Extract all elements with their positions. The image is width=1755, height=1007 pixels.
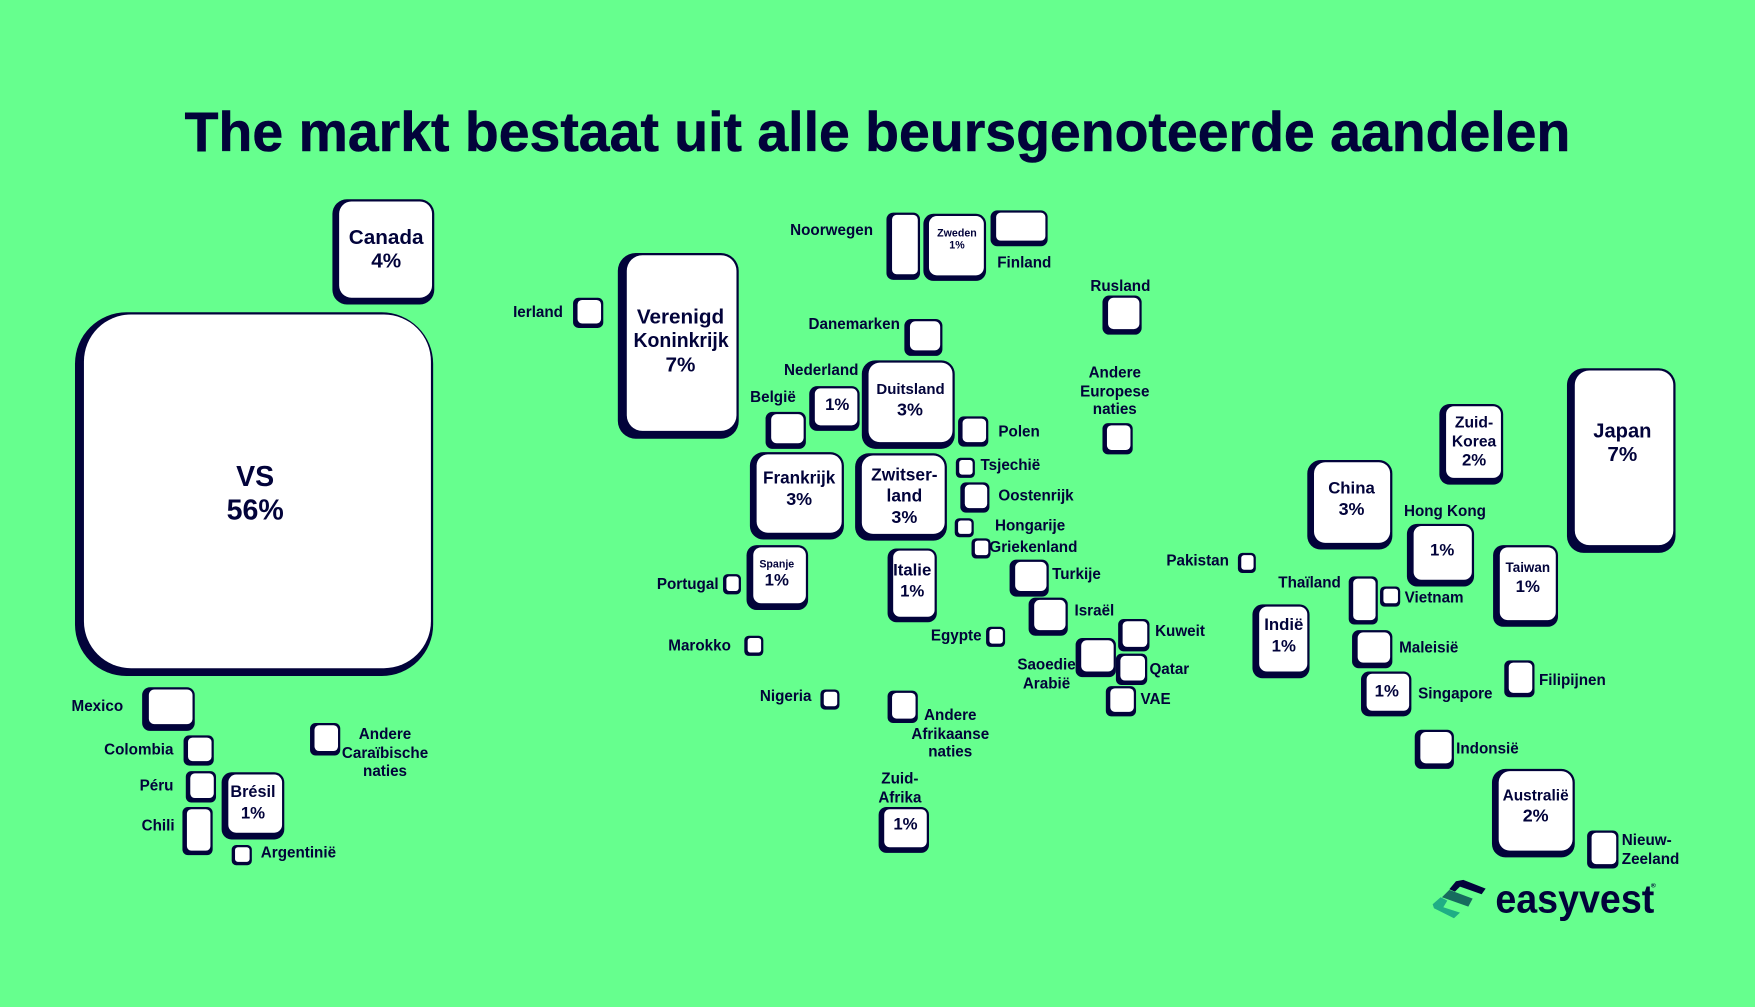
country: VAE: [1106, 686, 1171, 716]
country: Zuid-Afrika: Zuid-: [881, 771, 918, 788]
country: Nieuw-Zeeland: [1587, 830, 1679, 869]
country: Taiwan: 1%: [1516, 577, 1540, 596]
country: Andere Afrikaanse naties: [888, 691, 989, 761]
country: Colombia: Colombia: [104, 741, 174, 758]
country: Polen: [958, 416, 1040, 447]
country: Egypte: [931, 627, 1005, 647]
country: Oostenrijk: Oostenrijk: [998, 487, 1074, 504]
country: Brésil: Brésil: [230, 783, 275, 801]
country: Griekenland: Griekenland: [989, 539, 1077, 556]
country: Indië: Indië: [1264, 615, 1303, 634]
country: Thaïland: [1278, 575, 1378, 625]
country: Australië: 2%: [1523, 806, 1549, 826]
country: Singapore: Singapore: [1418, 686, 1493, 703]
country: Ierland: Ierland: [513, 304, 563, 321]
country: Zweden: Zweden: [937, 227, 977, 239]
country: Nieuw-Zeeland: Zeeland: [1622, 851, 1679, 868]
country: Andere Europese naties: [1080, 364, 1149, 454]
country: Danemarken: [809, 316, 942, 356]
country: Italie: [888, 548, 937, 622]
country: Nederland: 1%: [825, 395, 849, 414]
country: Andere Afrikaanse naties: Afrikaanse: [911, 726, 989, 743]
country: China: China: [1328, 479, 1375, 498]
country: Zuid-Korea: [1439, 404, 1503, 485]
country: Ierland: [513, 298, 603, 328]
country: Tsjechië: [956, 457, 1040, 478]
country: Péru: Péru: [140, 777, 173, 794]
country: Verenigd Koninkrijk: [618, 253, 739, 439]
country: Hong Kong: [1404, 503, 1486, 586]
country: Canada: [332, 199, 434, 304]
country: Zwitserland: 3%: [891, 507, 917, 527]
country: Taiwan: [1493, 545, 1558, 627]
country: Saoedie-Arabië: Saoedie: [1017, 656, 1076, 673]
country: Andere Caraïbische naties: naties: [363, 763, 407, 780]
country: Andere Afrikaanse naties: naties: [928, 744, 972, 761]
country: Verenigd Koninkrijk: Koninkrijk: [634, 329, 729, 352]
country: Nigeria: [760, 688, 839, 710]
country: Nederland: Nederland: [784, 362, 858, 379]
country: Indië: 1%: [1272, 637, 1296, 656]
country: Finland: Finland: [997, 255, 1051, 272]
country: Qatar: Qatar: [1149, 661, 1189, 678]
country: Israël: [1029, 598, 1114, 636]
country: Italie: 1%: [900, 582, 924, 601]
country: Marokko: [668, 636, 763, 656]
country: Spanje: Spanje: [759, 559, 794, 571]
country: Duitsland: Duitsland: [876, 381, 945, 398]
country: Andere Europese naties: Andere: [1089, 364, 1141, 381]
country: Hongarije: [955, 518, 1065, 537]
country: Israël: Israël: [1074, 603, 1114, 620]
country: Singapore: [1361, 672, 1493, 716]
country: Portugal: [657, 574, 741, 594]
country: Portugal: Portugal: [657, 576, 719, 593]
country: Australië: [1492, 769, 1575, 857]
country: Chili: [142, 807, 213, 855]
country: VS: [75, 312, 433, 676]
country: Pakistan: Pakistan: [1166, 552, 1229, 569]
country: Maleisië: Maleisië: [1399, 640, 1458, 657]
country: Zwitserland: Zwitser-: [871, 464, 938, 484]
country: Mexico: Mexico: [72, 698, 123, 715]
country: Frankrijk: Frankrijk: [763, 469, 836, 488]
country: Oostenrijk: [960, 482, 1074, 513]
country: Andere Afrikaanse naties: Andere: [924, 707, 976, 724]
country: Indië: [1252, 604, 1310, 678]
country: België: België: [750, 389, 796, 406]
country: Mexico: [72, 687, 195, 731]
country: Turkije: [1010, 560, 1101, 597]
wordmark: easyvest: [1495, 876, 1654, 921]
country: Japan: [1567, 368, 1676, 553]
country: Colombia: [104, 735, 214, 766]
country: Brésil: 1%: [241, 803, 265, 822]
country: Australië: Australië: [1503, 787, 1569, 804]
country: Vietnam: Vietnam: [1405, 589, 1464, 606]
country: Andere Caraïbische naties: Andere: [359, 726, 411, 743]
country: Vietnam: [1380, 586, 1464, 607]
country: Zwitserland: [855, 453, 947, 541]
country: Canada: Canada: [349, 226, 424, 249]
registered mark: ®: [1651, 882, 1656, 890]
country: Argentinië: Argentinië: [261, 844, 336, 861]
country: Kuweit: Kuweit: [1155, 623, 1205, 640]
country: Marokko: Marokko: [668, 637, 731, 654]
country: Hong Kong: Hong Kong: [1404, 503, 1486, 520]
country: Zuid-Korea: Korea: [1452, 434, 1497, 451]
country: Rusland: Rusland: [1090, 278, 1150, 295]
country: Brésil: [222, 772, 284, 839]
icon: easyvest mark: [1433, 880, 1486, 918]
country: Japan: Japan: [1593, 421, 1651, 443]
country: Hong Kong: 1%: [1430, 540, 1454, 559]
country: Frankrijk: 3%: [786, 489, 812, 509]
country: VS: 56%: [227, 494, 284, 526]
country: VS: VS: [236, 461, 274, 493]
country: Indonesië: [1415, 730, 1519, 769]
country: Japan: 7%: [1607, 443, 1637, 466]
country: Danemarken: Danemarken: [809, 316, 900, 333]
country: Andere Europese naties: naties: [1093, 401, 1137, 418]
logo: easyvest: [1433, 876, 1656, 921]
country: Noorwegen: Noorwegen: [790, 222, 873, 239]
country: Zweden: [923, 214, 986, 281]
country: Taiwan: Taiwan: [1506, 560, 1550, 575]
country: Nigeria: Nigeria: [760, 688, 812, 705]
country: Italie: Italie: [893, 560, 931, 579]
country: Spanje: [747, 545, 808, 610]
country: Nederland: [784, 362, 860, 431]
country: Kuweit: [1118, 619, 1205, 651]
country: Thaïland: Thaïland: [1278, 575, 1341, 592]
country: Qatar: [1116, 654, 1189, 685]
country: Saoedie-Arabië: [1017, 638, 1116, 692]
country: Nieuw-Zeeland: Nieuw-: [1622, 832, 1672, 849]
country: Zwitserland: land: [887, 486, 922, 506]
country: Zweden: 1%: [949, 240, 965, 252]
country: Indonesië: Indonsië: [1456, 740, 1519, 757]
country: Egypte: Egypte: [931, 627, 982, 644]
country: Andere Caraïbische naties: [310, 723, 428, 780]
country: Rusland: [1090, 278, 1150, 335]
country: Andere Caraïbische naties: Caraïbische: [342, 745, 428, 762]
country: Zuid-Korea: Zuid-: [1455, 415, 1493, 432]
country: Péru: [140, 771, 216, 803]
country: Filipijnen: Filipijnen: [1539, 672, 1606, 689]
country: Finland: [991, 210, 1051, 272]
country: Zuid-Afrika: 1%: [893, 814, 918, 833]
country: Hongarije: Hongarije: [995, 518, 1065, 535]
country: Chili: Chili: [142, 818, 175, 835]
country: Pakistan: [1166, 552, 1256, 573]
country: VAE: VAE: [1141, 691, 1171, 708]
country: Singapore: 1%: [1375, 681, 1399, 700]
country: Duitsland: [862, 360, 955, 449]
country: Zuid-Afrika: Afrika: [878, 790, 922, 807]
country: Andere Europese naties: Europese: [1080, 383, 1149, 400]
country: Turkije: Turkije: [1052, 566, 1101, 583]
country: Zuid-Korea: 2%: [1462, 451, 1486, 470]
country: Maleisië: [1352, 630, 1458, 668]
country: Zuid-Afrika: [878, 771, 929, 853]
country: Saoedie-Arabië: Arabië: [1023, 675, 1070, 692]
country: Polen: Polen: [998, 424, 1040, 441]
country: Tsjechië: Tsjechië: [980, 457, 1040, 474]
country: Duitsland: 3%: [897, 399, 923, 419]
country: Noorwegen: [790, 213, 920, 280]
country: Frankrijk: [750, 452, 844, 539]
country: Argentinië: [232, 844, 336, 865]
country: China: [1307, 460, 1392, 550]
country: Spanje: 1%: [765, 570, 789, 589]
country: China: 3%: [1339, 499, 1365, 519]
title: The markt bestaat uit alle beursgenoteerde aandelen: [185, 100, 1570, 163]
country: Canada: 4%: [371, 250, 401, 273]
country: België: [750, 389, 806, 449]
country: Verenigd Koninkrijk: Verenigd: [637, 306, 724, 329]
country: Verenigd Koninkrijk: 7%: [666, 354, 695, 377]
country: Filipijnen: [1504, 660, 1606, 697]
